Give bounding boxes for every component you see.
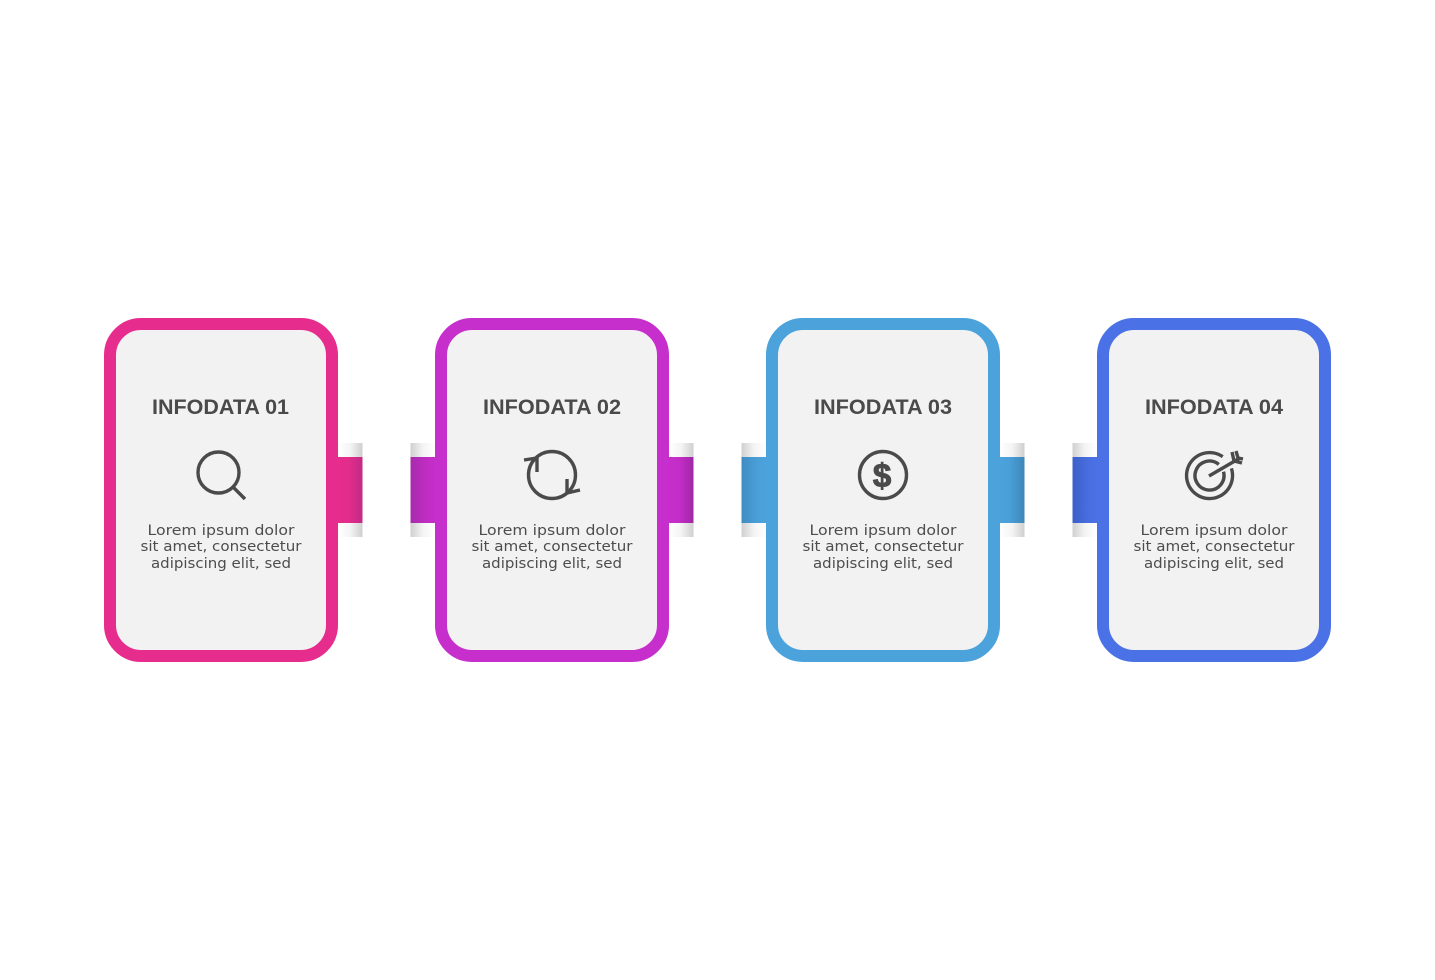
connector: card 1 right tab xyxy=(336,443,362,537)
icon: refresh arrows xyxy=(524,452,580,498)
icon: magnifying glass xyxy=(198,452,245,499)
text block: description 01: sit amet, consectetur xyxy=(140,538,302,555)
text block: description 02: adipiscing elit, sed xyxy=(482,555,622,572)
text block: description 03: sit amet, consectetur xyxy=(802,538,964,555)
connector: card 2 right tab xyxy=(667,443,694,537)
heading: infodata 02: INFODATA 02 xyxy=(483,396,621,419)
icon: target with arrow xyxy=(1187,451,1243,499)
heading: infodata 04: INFODATA 04 xyxy=(1145,396,1283,419)
panel: infodata 04 xyxy=(1103,324,1325,656)
text block: description 03 xyxy=(802,522,964,572)
panel: infodata 02 xyxy=(441,324,663,656)
connector: card 2 left tab xyxy=(410,443,438,537)
connector: card 3 right tab xyxy=(998,443,1024,537)
panel: infodata 01 xyxy=(110,324,332,656)
text block: description 04: Lorem ipsum dolor xyxy=(1140,522,1288,539)
text block: description 01 xyxy=(140,522,302,572)
connector: card 3 left tab xyxy=(742,443,768,537)
text block: description 04: adipiscing elit, sed xyxy=(1144,555,1284,572)
text block: description 03: adipiscing elit, sed xyxy=(813,555,953,572)
text block: description 01: adipiscing elit, sed xyxy=(151,555,291,572)
text block: description 04 xyxy=(1134,522,1294,572)
text block: description 03: Lorem ipsum dolor xyxy=(810,522,956,539)
text block: description 04: sit amet, consectetur xyxy=(1134,538,1294,555)
text block: description 02: sit amet, consectetur xyxy=(472,538,632,555)
heading: infodata 03: INFODATA 03 xyxy=(814,396,952,419)
icon: dollar coin xyxy=(860,452,906,498)
text block: description 02 xyxy=(472,522,632,572)
text block: description 01: Lorem ipsum dolor xyxy=(148,522,294,539)
connector: card 4 left tab xyxy=(1072,443,1100,537)
text block: description 02: Lorem ipsum dolor xyxy=(478,522,626,539)
icon: dollar coin: $ xyxy=(873,457,891,494)
heading: infodata 01: INFODATA 01 xyxy=(152,396,289,419)
panel: infodata 03 xyxy=(772,324,994,656)
